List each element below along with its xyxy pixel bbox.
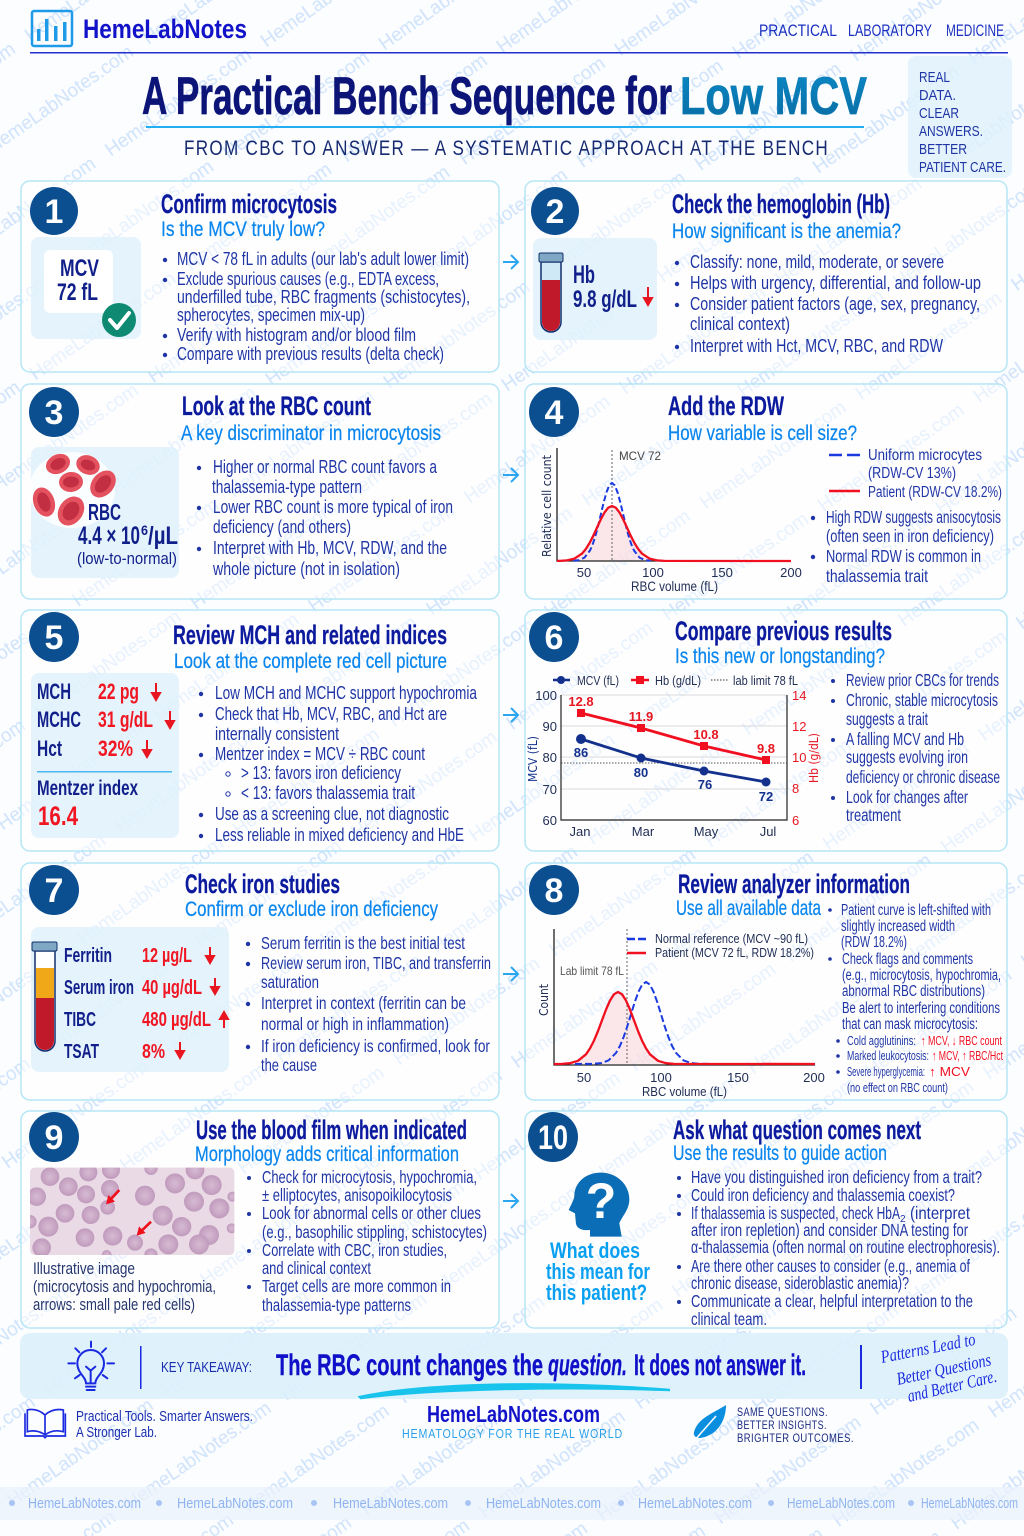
swoosh underline xyxy=(360,1384,670,1398)
bullet list: Target cells are more common in xyxy=(262,1276,451,1296)
badge 4 xyxy=(529,387,579,437)
iron values card xyxy=(31,927,229,1072)
histogram chart xyxy=(537,929,825,1099)
iron values card: 8% xyxy=(142,1041,165,1063)
RBC value card: 4.4 × 10 xyxy=(78,522,140,550)
bullet list xyxy=(199,683,478,845)
MCV value card: MCV xyxy=(60,255,99,282)
line chart: MCV and Hb trend: 8 xyxy=(792,781,799,796)
line chart: MCV and Hb trend: 60 xyxy=(543,813,557,828)
bullet list: Exclude spurious causes (e.g., EDTA excess, xyxy=(177,269,439,289)
Mentzer index value: Mentzer index xyxy=(37,777,138,800)
film caption xyxy=(33,1259,216,1314)
histogram chart: 50 xyxy=(577,1070,591,1085)
subheading: Is this new or longstanding? xyxy=(675,644,885,668)
line chart: MCV and Hb trend: MCV (fL) xyxy=(526,736,540,782)
bullet list: If iron deficiency is confirmed, look for xyxy=(261,1036,490,1056)
bullet list: Classify: none, mild, moderate, or severe xyxy=(690,252,944,272)
question callout: this mean for xyxy=(546,1259,650,1284)
bottom watermark strip: HemeLabNotes.com xyxy=(638,1495,752,1512)
bullet list: the cause xyxy=(261,1055,317,1075)
badge 6: 6 xyxy=(545,619,563,657)
line chart: MCV and Hb trend: 100 xyxy=(535,688,557,703)
bullet list: Marked leukocytosis: xyxy=(847,1048,929,1063)
badge 4: 4 xyxy=(545,394,564,432)
histogram chart: Lab limit 78 fL xyxy=(560,964,624,978)
subheading: Confirm or exclude iron deficiency xyxy=(185,897,438,921)
bullet list: Interpret in context (ferritin can be xyxy=(261,993,466,1013)
brand name: HemeLabNotes xyxy=(83,14,247,44)
icon: light bulb xyxy=(68,1342,114,1390)
bullet list: Lower RBC count is more typical of iron xyxy=(213,497,453,517)
bullet list: underfilled tube, RBC fragments (schistocytes), xyxy=(177,287,470,307)
subheading: Is the MCV truly low? xyxy=(161,217,325,241)
bullet list xyxy=(163,249,470,364)
chart legend: Uniform microcytes xyxy=(868,447,982,464)
badge 10: 10 xyxy=(538,1119,568,1157)
key takeaway banner xyxy=(20,1329,1008,1406)
badge 9: 9 xyxy=(45,1119,63,1157)
RBC histogram chart: RBC volume (fL) xyxy=(631,578,718,594)
badge 10 xyxy=(528,1112,578,1162)
arrow: step 1 to 2 xyxy=(503,255,518,269)
question callout xyxy=(546,1238,650,1305)
chart legend xyxy=(553,673,798,688)
icon: iron tube xyxy=(32,942,57,1051)
footer right: leaf and message: BETTER INSIGHTS. xyxy=(737,1418,827,1432)
side note: BETTER xyxy=(919,141,967,158)
RBC value card: (low-to-normal) xyxy=(77,549,177,568)
icon: blood tube xyxy=(539,253,563,332)
line chart: MCV and Hb trend: 86 xyxy=(574,745,588,760)
bullet list xyxy=(828,902,1003,1095)
bullet list: (interpret xyxy=(910,1203,970,1223)
bullet list: treatment xyxy=(846,805,901,825)
indices card: MCHC xyxy=(37,707,81,732)
panel 2: hemoglobin xyxy=(525,181,1007,372)
bullet list: Interpret with Hct, MCV, RBC, and RDW xyxy=(690,336,943,356)
bullet list: thalassemia-type pattern xyxy=(212,477,362,497)
icon: head with question mark xyxy=(569,1173,629,1237)
footer right: leaf and message xyxy=(694,1405,854,1445)
bullet list xyxy=(675,252,981,356)
bullet list: Mentzer index = MCV ÷ RBC count xyxy=(215,744,425,764)
bullet list: Look for abnormal cells or other clues xyxy=(262,1203,481,1223)
badge 9 xyxy=(29,1112,79,1162)
bullet list: suggests evolving iron xyxy=(846,747,968,767)
title: Low MCV xyxy=(680,67,867,126)
badge 5 xyxy=(29,612,79,662)
subheading: Look at the complete red cell picture xyxy=(174,649,447,673)
panel 9: blood film xyxy=(21,1111,499,1328)
heading: Compare previous results xyxy=(675,616,892,646)
badge 5: 5 xyxy=(45,619,63,657)
film caption: (microcytosis and hypochromia, xyxy=(33,1277,216,1296)
RBC histogram chart: Relative cell count xyxy=(540,455,554,557)
bullet list: deficiency (and others) xyxy=(213,517,351,537)
line chart: MCV and Hb trend: Hb (g/dL) xyxy=(807,733,821,783)
histogram chart: 100 xyxy=(650,1070,672,1085)
RBC value card: /µL xyxy=(148,522,178,550)
heading: Add the RDW xyxy=(668,391,784,421)
histogram chart: Normal reference (MCV ~90 fL) xyxy=(655,931,808,946)
footer right: leaf and message: SAME QUESTIONS. xyxy=(737,1405,828,1419)
icon: logo xyxy=(32,11,72,46)
RBC histogram chart xyxy=(540,448,802,594)
header tagline: LABORATORY xyxy=(848,21,932,40)
footer left: book and slogan: A Stronger Lab. xyxy=(76,1425,157,1441)
badge 7: 7 xyxy=(45,872,63,910)
Hb value card xyxy=(533,238,657,340)
bullet list: spherocytes, specimen mix-up) xyxy=(177,305,365,325)
bottom watermark strip: HemeLabNotes.com xyxy=(787,1495,895,1512)
script slogan: Patterns Lead to xyxy=(878,1329,977,1367)
bullet list xyxy=(677,1167,1000,1329)
icon: check xyxy=(102,303,136,337)
subheading: A key discriminator in microcytosis xyxy=(181,421,441,445)
heading: Use the blood film when indicated xyxy=(196,1115,467,1145)
bullet list: Interpret with Hb, MCV, RDW, and the xyxy=(213,538,447,558)
footer center: brand xyxy=(402,1401,623,1441)
line chart: MCV and Hb trend: 10.8 xyxy=(693,727,719,742)
line chart: MCV and Hb trend: 9.8 xyxy=(757,741,775,756)
bullet list xyxy=(246,933,491,1075)
indices card: 32% xyxy=(98,736,133,761)
line chart: MCV and Hb trend: 90 xyxy=(543,719,557,734)
bullet list: slightly increased width xyxy=(841,918,955,935)
question callout: What does xyxy=(550,1238,640,1263)
bullet list: A falling MCV and Hb xyxy=(846,729,964,749)
line chart: MCV and Hb trend: 12.8 xyxy=(568,694,594,709)
bullet list: thalassemia trait xyxy=(826,566,928,586)
chart legend: Hb (g/dL) xyxy=(655,673,701,688)
indices card: 22 pg xyxy=(98,679,139,704)
subheading: How variable is cell size? xyxy=(668,421,857,445)
line chart: MCV and Hb trend: Mar xyxy=(632,824,655,839)
side note xyxy=(908,56,1012,178)
line chart: MCV and Hb trend: 11.9 xyxy=(629,709,653,724)
blood film illustration xyxy=(30,1168,234,1255)
panel 8: analyzer information xyxy=(525,863,1007,1100)
subheading: Morphology adds critical information xyxy=(195,1142,459,1166)
bullet list: clinical context) xyxy=(690,314,790,334)
iron values card: 40 µg/dL xyxy=(142,977,202,999)
bullet list: ↑ MCV xyxy=(929,1064,970,1079)
bullet list: Check for microcytosis, hypochromia, xyxy=(262,1167,477,1187)
chart legend xyxy=(829,447,1002,501)
film caption: arrows: small pale red cells) xyxy=(33,1295,195,1314)
histogram chart: Patient (MCV 72 fL, RDW 18.2%) xyxy=(655,945,814,960)
badge 8: 8 xyxy=(545,872,563,910)
bullet list: > 13: favors iron deficiency xyxy=(241,763,401,783)
badge 3 xyxy=(29,387,79,437)
badge 2 xyxy=(531,187,579,235)
bottom watermark strip: HemeLabNotes.com xyxy=(486,1495,601,1512)
line chart: MCV and Hb trend: May xyxy=(694,824,719,839)
MCV value card xyxy=(31,237,141,339)
bullet list: Higher or normal RBC count favors a xyxy=(213,457,438,477)
indices card: 31 g/dL xyxy=(98,707,153,732)
line chart: MCV and Hb trend: 12 xyxy=(792,719,806,734)
bullet list: suggests a trait xyxy=(846,709,928,729)
arrow: low xyxy=(644,287,652,305)
arrow: step 5 to 6 xyxy=(503,708,518,722)
script slogan xyxy=(878,1329,999,1406)
bullet list xyxy=(831,670,1000,825)
footer center: brand: HEMATOLOGY FOR THE REAL WORLD xyxy=(402,1426,623,1441)
badge 3: 3 xyxy=(45,394,63,432)
RBC value card xyxy=(29,447,179,578)
histogram chart: Count xyxy=(537,984,551,1016)
bottom watermark strip xyxy=(0,1487,1024,1520)
bullet list: 2 xyxy=(900,1214,906,1225)
header tagline xyxy=(759,21,1004,40)
RBC value card: RBC xyxy=(88,499,121,525)
chart legend: MCV (fL) xyxy=(577,673,619,688)
heading: Check the hemoglobin (Hb) xyxy=(672,189,890,219)
header tagline: PRACTICAL xyxy=(759,21,837,40)
side note: ANSWERS. xyxy=(919,123,983,140)
indices card: MCH xyxy=(37,679,71,704)
heading: Review MCH and related indices xyxy=(173,620,447,650)
bullet list: Check that Hb, MCV, RBC, and Hct are xyxy=(215,704,447,724)
panel 7: iron studies xyxy=(21,863,499,1100)
badge 2: 2 xyxy=(546,193,564,231)
RBC histogram chart: 150 xyxy=(711,565,733,580)
bullet list: (RDW 18.2%) xyxy=(841,934,907,951)
RBC value card: 6 xyxy=(141,522,148,538)
bullet list: If thalassemia is suspected, check HbA xyxy=(691,1203,900,1223)
histogram chart: RBC volume (fL) xyxy=(642,1084,727,1099)
icon: head with question mark: ? xyxy=(586,1173,616,1229)
side note: CLEAR xyxy=(919,105,959,122)
film caption: Illustrative image xyxy=(33,1259,135,1278)
bullet list: Review serum iron, TIBC, and transferrin xyxy=(261,953,491,973)
Mentzer index value xyxy=(37,777,138,831)
bullet list: < 13: favors thalassemia trait xyxy=(241,783,415,803)
badge 6 xyxy=(529,612,579,662)
MCV value card: 72 fL xyxy=(57,279,98,306)
icon: book xyxy=(25,1410,65,1438)
bottom watermark strip: HemeLabNotes.com xyxy=(333,1495,448,1512)
bullet list xyxy=(197,457,453,579)
bullet list: Low MCH and MCHC support hypochromia xyxy=(215,683,478,703)
badge 1: 1 xyxy=(45,193,63,231)
panel 3: RBC count xyxy=(21,384,499,599)
line chart: MCV and Hb trend: Jan xyxy=(570,824,590,839)
bullet list: Check flags and comments xyxy=(842,951,973,968)
badge 7 xyxy=(29,865,79,915)
line chart: MCV and Hb trend xyxy=(526,688,821,839)
arrow: step 7 to 8 xyxy=(503,967,518,981)
RBC histogram chart: MCV 72 xyxy=(619,449,661,463)
chart legend: (RDW-CV 13%) xyxy=(868,465,956,482)
script slogan: Better Questions xyxy=(895,1349,993,1389)
bullet list: Use as a screening clue, not diagnostic xyxy=(215,804,449,824)
bullet list: chronic disease, sideroblastic anemia)? xyxy=(691,1273,909,1293)
iron values card: TSAT xyxy=(64,1041,99,1063)
Hb value card: 9.8 g/dL xyxy=(573,286,637,313)
bullet list: (e.g., basophilic stippling, schistocytes) xyxy=(262,1222,487,1242)
bottom watermark strip: HemeLabNotes.com xyxy=(177,1495,293,1512)
side note: DATA. xyxy=(919,87,956,104)
footer left: book and slogan: Practical Tools. Smarter Answers. xyxy=(76,1409,253,1425)
bullet list: Serum ferritin is the best initial test xyxy=(261,933,465,953)
line chart: MCV and Hb trend: 76 xyxy=(698,777,712,792)
heading: Check iron studies xyxy=(185,869,340,899)
icon: leaf xyxy=(694,1405,726,1441)
arrow: step 9 to 10 xyxy=(503,1194,518,1208)
iron values card: 12 µg/L xyxy=(142,945,192,967)
badge 8 xyxy=(529,865,579,915)
heading: Look at the RBC count xyxy=(182,391,371,421)
bullet list: Correlate with CBC, iron studies, xyxy=(262,1240,447,1260)
panel 6: previous results xyxy=(525,610,1007,851)
bullet list: ± elliptocytes, anisopoikilocytosis xyxy=(262,1185,452,1205)
iron values card: TIBC xyxy=(64,1009,96,1031)
subheading: Use all available data xyxy=(676,896,821,920)
bullet list: saturation xyxy=(261,972,319,992)
bullet list: clinical team. xyxy=(691,1309,767,1329)
histogram chart: 150 xyxy=(727,1070,749,1085)
bullet list: Look for changes after xyxy=(846,787,968,807)
footer right: leaf and message: BRIGHTER OUTCOMES. xyxy=(737,1431,854,1445)
panel 5: MCH and indices xyxy=(21,610,499,851)
footer left: book and slogan xyxy=(25,1409,253,1441)
subheading: Use the results to guide action xyxy=(673,1141,887,1165)
badge 1 xyxy=(30,187,78,235)
title: A Practical Bench Sequence for xyxy=(142,67,672,126)
indices card xyxy=(31,673,179,838)
bottom watermark strip: HemeLabNotes.com xyxy=(28,1495,141,1512)
Mentzer index value: 16.4 xyxy=(38,801,78,831)
heading: Confirm microcytosis xyxy=(161,189,337,219)
iron values card: 480 µg/dL xyxy=(142,1009,211,1031)
footer center: brand: HemeLabNotes.com xyxy=(427,1401,600,1427)
iron values card: Serum iron xyxy=(64,977,134,999)
iron values card: Ferritin xyxy=(64,945,112,967)
side note: REAL xyxy=(919,69,950,86)
bullet list: Severe hyperglycemia: xyxy=(847,1064,925,1079)
takeaway label: KEY TAKEAWAY: xyxy=(161,1359,252,1376)
panel 4: RDW xyxy=(525,384,1007,599)
line chart: MCV and Hb trend: 72 xyxy=(759,789,773,804)
question callout: this patient? xyxy=(546,1280,647,1305)
bullet list: MCV < 78 fL in adults (our lab's adult lower limit) xyxy=(177,249,469,269)
bullet list: Verify with histogram and/or blood film xyxy=(177,325,416,345)
bullet list: Compare with previous results (delta check) xyxy=(177,344,444,364)
line chart: MCV and Hb trend: Jul xyxy=(760,824,776,839)
RBC histogram chart: 200 xyxy=(780,565,802,580)
bullet list: and clinical context xyxy=(262,1258,371,1278)
line chart: MCV and Hb trend: 70 xyxy=(543,782,557,797)
header xyxy=(30,11,1008,54)
arrow: step 3 to 4 xyxy=(503,468,518,482)
line chart: MCV and Hb trend: 80 xyxy=(634,765,648,780)
line chart: MCV and Hb trend: 10 xyxy=(792,750,806,765)
bullet list xyxy=(811,507,1001,586)
bullet list: normal or high in inflammation) xyxy=(261,1014,449,1034)
takeaway statement: It does not answer it. xyxy=(634,1349,806,1382)
bullet list: Less reliable in mixed deficiency and HbE xyxy=(215,825,464,845)
bullet list: internally consistent xyxy=(215,724,339,744)
Hb value card: Hb xyxy=(573,261,595,289)
script slogan: and Better Care. xyxy=(905,1366,999,1406)
panel 10: next question xyxy=(525,1111,1007,1329)
line chart: MCV and Hb trend: 80 xyxy=(543,750,557,765)
line chart: MCV and Hb trend: 14 xyxy=(792,688,806,703)
bullet list: thalassemia-type patterns xyxy=(262,1295,411,1315)
takeaway statement: The RBC count changes the xyxy=(276,1349,543,1382)
histogram chart: 200 xyxy=(803,1070,825,1085)
bullet list xyxy=(247,1167,487,1315)
RBC histogram chart: 100 xyxy=(642,565,664,580)
panel 1: confirm microcytosis xyxy=(21,181,499,372)
subheading: How significant is the anemia? xyxy=(672,219,901,243)
bullet list: (no effect on RBC count) xyxy=(847,1080,948,1095)
bullet list: Cold agglutinins: xyxy=(847,1033,916,1048)
takeaway statement: question. xyxy=(548,1349,627,1382)
icon: red blood cells xyxy=(29,450,121,531)
line chart: MCV and Hb trend: 6 xyxy=(792,813,799,828)
subtitle: FROM CBC TO ANSWER — A SYSTEMATIC APPROACH AT THE BENCH xyxy=(184,137,829,160)
bullet list: whole picture (not in isolation) xyxy=(212,559,400,579)
chart legend: lab limit 78 fL xyxy=(733,673,798,688)
indices card: Hct xyxy=(37,736,62,761)
RBC histogram chart: 50 xyxy=(577,565,591,580)
